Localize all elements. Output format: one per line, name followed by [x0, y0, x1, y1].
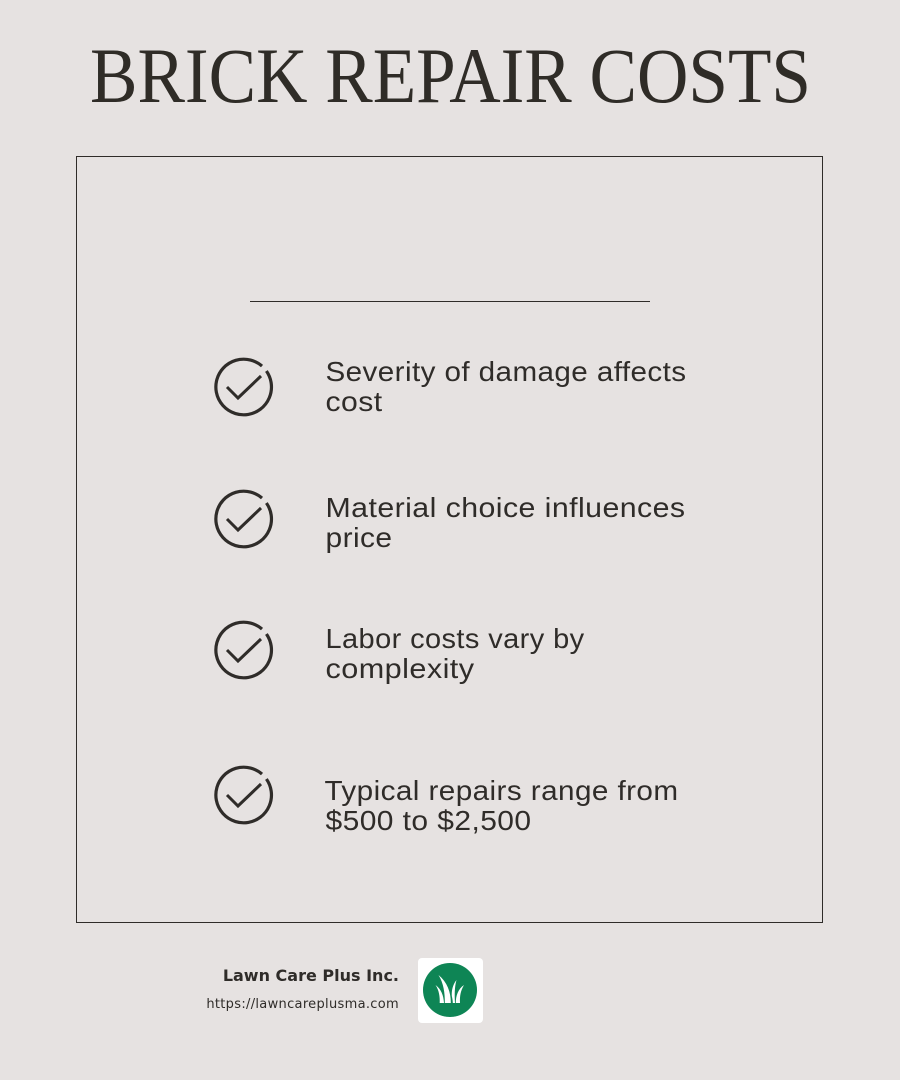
icon: check 4	[214, 766, 274, 824]
text: item 4: Typical repairs range from	[324, 775, 678, 806]
icon: check 2	[214, 490, 274, 548]
text: item 3: complexity	[326, 653, 474, 684]
text: item 2: Material choice influences	[326, 492, 686, 523]
text: item 1: Severity of damage affects	[326, 356, 686, 387]
text: item 2: price	[326, 522, 392, 553]
divider line	[250, 301, 650, 302]
company name: Lawn Care Plus Inc.	[223, 966, 399, 985]
text: item 4: $500 to $2,500	[326, 805, 531, 836]
text: item 4	[324, 775, 678, 836]
title: BRICK REPAIR COSTS	[90, 32, 811, 119]
text: item 1: cost	[326, 386, 383, 417]
text: item 3	[326, 623, 584, 684]
text: item 1	[326, 356, 686, 417]
logo	[418, 958, 483, 1023]
icon: check 1	[214, 358, 274, 416]
company url: https://lawncareplusma.com	[206, 997, 399, 1012]
text: item 2	[326, 492, 686, 553]
text: item 3: Labor costs vary by	[326, 623, 584, 654]
icon: check 3	[214, 620, 274, 680]
panel: frame	[76, 156, 823, 923]
